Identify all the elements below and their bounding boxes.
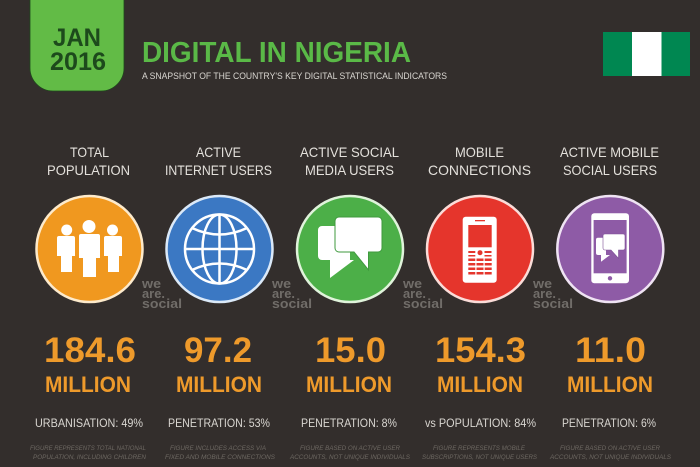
value: 15.0: [315, 331, 386, 370]
date tab: 2016: [50, 48, 106, 76]
brand mark: social: [272, 296, 312, 311]
stat: PENETRATION: 8%: [301, 418, 397, 430]
brand mark: we: [402, 276, 422, 291]
brand mark: are.: [272, 286, 295, 301]
footnote: FIGURE REPRESENTS TOTAL NATIONAL: [30, 445, 147, 452]
footnote: [422, 445, 538, 461]
stat: PENETRATION: 6%: [562, 418, 656, 430]
brand mark: we: [532, 276, 552, 291]
footnote: FIGURE INCLUDES ACCESS VIA: [170, 445, 266, 452]
stat: URBANISATION: 49%: [35, 418, 143, 430]
icon: Nigerian flag: [603, 32, 690, 76]
brand mark: social: [403, 296, 443, 311]
panel: active internet users: [165, 144, 312, 461]
brand mark: social: [533, 296, 573, 311]
brand mark: are.: [403, 286, 426, 301]
brand mark: [271, 276, 312, 311]
heading: total population: [47, 144, 130, 178]
value: 154.3: [435, 331, 526, 370]
icon: globe: [166, 196, 272, 302]
heading: active internet users: [165, 144, 272, 178]
brand mark: social: [142, 296, 182, 311]
heading: active mobile social users: ACTIVE MOBILE: [560, 144, 659, 160]
unit: MILLION: [306, 372, 392, 397]
brand mark: are.: [142, 286, 165, 301]
heading: total population: TOTAL: [70, 144, 109, 160]
footnote: [165, 445, 276, 461]
panel: active social media users: [289, 144, 443, 461]
unit: MILLION: [176, 372, 262, 397]
value: 184.6: [44, 331, 136, 370]
footnote: FIGURE REPRESENTS MOBILE: [433, 445, 526, 452]
panel: mobile connections: [422, 144, 573, 461]
footnote: SUBSCRIPTIONS, NOT UNIQUE USERS: [422, 454, 538, 461]
heading: active social media users: ACTIVE SOCIAL: [300, 144, 399, 160]
brand mark: [141, 276, 182, 311]
brand mark: [532, 276, 573, 311]
icon: smartphone with speech bubbles: [557, 196, 663, 302]
unit: MILLION: [437, 372, 523, 397]
unit: MILLION: [45, 372, 131, 397]
footnote: [30, 445, 147, 461]
brand mark: we: [271, 276, 291, 291]
date tab: JAN: [53, 24, 101, 52]
footnote: [289, 445, 411, 461]
stat: vs POPULATION: 84%: [425, 418, 536, 430]
heading: active internet users: ACTIVE: [196, 144, 241, 160]
value: 11.0: [575, 331, 646, 370]
footnote: [549, 445, 672, 461]
heading: active social media users: MEDIA USERS: [305, 162, 394, 178]
panel: active mobile social users: [549, 144, 672, 461]
icon: people: [36, 196, 142, 302]
footnote: FIGURE BASED ON ACTIVE USER: [300, 445, 401, 452]
brand mark: we: [141, 276, 161, 291]
value: 97.2: [184, 331, 252, 370]
title: DIGITAL IN NIGERIA: [142, 37, 411, 69]
footnote: ACCOUNTS, NOT UNIQUE INDIVIDUALS: [289, 454, 411, 461]
unit: MILLION: [567, 372, 653, 397]
date tab: [30, 0, 124, 91]
heading: mobile connections: MOBILE: [455, 144, 504, 160]
icon: speech bubbles: [297, 196, 403, 302]
subtitle: A SNAPSHOT OF THE COUNTRY'S KEY DIGITAL STATISTICAL INDICATORS: [142, 71, 447, 82]
panel: total population: [30, 144, 182, 461]
brand mark: [402, 276, 443, 311]
footnote: ACCOUNTS, NOT UNIQUE INDIVIDUALS: [549, 454, 672, 461]
heading: active internet users: INTERNET USERS: [165, 162, 272, 178]
heading: active mobile social users: SOCIAL USERS: [563, 162, 657, 178]
heading: active mobile social users: [560, 144, 659, 178]
heading: active social media users: [300, 144, 399, 178]
icon: mobile phone: [427, 196, 533, 302]
footnote: FIXED AND MOBILE CONNECTIONS: [165, 454, 276, 461]
footnote: FIGURE BASED ON ACTIVE USER: [560, 445, 661, 452]
stat: PENETRATION: 53%: [168, 418, 270, 430]
heading: total population: POPULATION: [47, 162, 130, 178]
footnote: POPULATION, INCLUDING CHILDREN: [33, 454, 147, 461]
heading: mobile connections: CONNECTIONS: [428, 162, 531, 178]
heading: mobile connections: [428, 144, 531, 178]
brand mark: are.: [533, 286, 556, 301]
